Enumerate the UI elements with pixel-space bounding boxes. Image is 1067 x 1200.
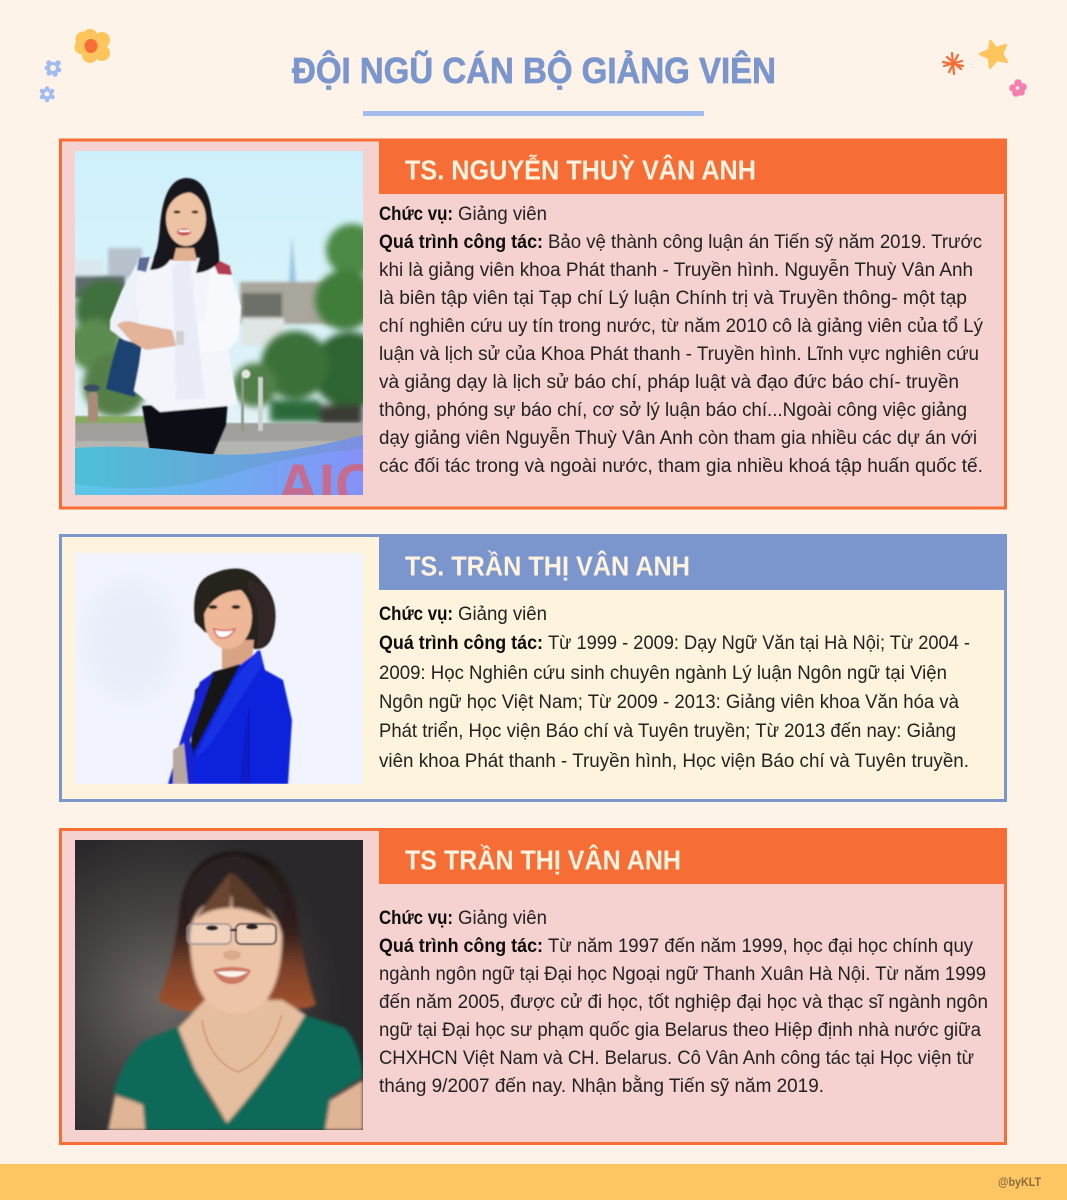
- left sleeve: [109, 262, 138, 344]
- panel: TS. Nguyễn Thuỳ Vân Anh: [60, 139, 1007, 518]
- footer bar: [0, 1164, 1067, 1200]
- nose: [223, 950, 241, 960]
- body text: là biên tập viên tại Tạp chí Lý luận Chính trị và Truyền thông- một tạp: [379, 288, 967, 309]
- neck: [173, 248, 197, 261]
- body text: CHXHCN Việt Nam và CH. Belarus. Cô Vân Anh công tác tại Học viện từ: [379, 1048, 974, 1069]
- title: ĐỘI NGŨ CÁN BỘ GIẢNG VIÊN: [292, 49, 776, 91]
- body text: ngành ngôn ngữ tại Đại học Ngoại ngữ Thanh Xuân Hà Nội. Từ năm 1999: [379, 964, 986, 985]
- right sleeve: [228, 276, 242, 350]
- body text: chí nghiên cứu uy tín trong nước, từ năm 2010 cô là giảng viên của tổ Lý: [379, 316, 983, 337]
- pants: [142, 399, 228, 455]
- hair: [158, 851, 316, 1012]
- card background: [60, 830, 1006, 1144]
- back hair: [156, 176, 220, 261]
- body text: Giảng viên: [458, 604, 547, 625]
- body text: Từ năm 1997 đến năm 1999, học đại học chính quy: [548, 936, 973, 957]
- body text: Quá trình công tác:: [379, 232, 543, 253]
- body text: Bảo vệ thành công luận án Tiến sỹ năm 2019. Trước: [548, 232, 982, 253]
- jacket: [168, 672, 214, 784]
- portrait photo: [75, 553, 363, 784]
- body text: Phát triển, Học viện Báo chí và Tuyên truyền; Từ 2013 đến nay: Giảng: [379, 721, 956, 742]
- body text: thông, phóng sự báo chí, cơ sở lý luận báo chí...Ngoài công việc giảng: [379, 400, 967, 421]
- heading bar: [379, 139, 1007, 194]
- body text: [379, 908, 988, 1097]
- body text: các đối tác trong và ngoài nước, tham gia nhiều khoá tập huấn quốc tế.: [379, 456, 983, 477]
- icon: small blue flower bottom: [40, 86, 55, 102]
- body text: khi là giảng viên khoa Phát thanh - Truyền hình. Nguyễn Thuỳ Vân Anh: [379, 259, 973, 281]
- heading: TS. NGUYỄN THUỲ VÂN ANH: [405, 154, 756, 186]
- face: [166, 192, 206, 246]
- card background: [60, 140, 1006, 508]
- body text: Chức vụ:: [379, 604, 453, 625]
- body text: Từ 1999 - 2009: Dạy Ngữ Văn tại Hà Nội; Từ 2004 -: [548, 633, 970, 654]
- wave: [75, 435, 363, 488]
- bag: [106, 338, 142, 397]
- body text: và giảng dạy là lịch sử báo chí, pháp luật và đạo đức báo chí- truyền: [379, 372, 959, 393]
- body text: Quá trình công tác:: [379, 936, 543, 957]
- body text: [379, 604, 970, 772]
- credit: @byKLT: [998, 1177, 1041, 1189]
- necklace: [202, 1015, 282, 1072]
- body text: viên khoa Phát thanh - Truyền hình, Học viện Báo chí và Tuyên truyền.: [379, 751, 969, 772]
- glasses: [187, 924, 231, 944]
- icon: orange asterisk: [943, 53, 963, 74]
- body text: Chức vụ:: [379, 908, 453, 929]
- shirt body: [134, 257, 238, 412]
- skin: neck and chest: [178, 1000, 306, 1125]
- hair: [194, 569, 276, 649]
- body text: Chức vụ:: [379, 204, 453, 225]
- face: [204, 585, 252, 649]
- portrait photo: AIC: [277, 453, 377, 518]
- heading: TS TRẦN THỊ VÂN ANH: [405, 844, 681, 876]
- body text: Giảng viên: [458, 204, 547, 225]
- body text: đến năm 2005, được cử đi học, tốt nghiệp đại học và thạc sĩ ngành ngôn: [379, 992, 988, 1013]
- heading bar: [379, 535, 1007, 590]
- body text: ngữ tại Đại học sư phạm quốc gia Belarus theo Hiệp định nhà nước giữa: [379, 1020, 981, 1041]
- inner blouse: [190, 664, 242, 759]
- heading: TS. TRẦN THỊ VÂN ANH: [405, 550, 690, 582]
- face: [190, 896, 282, 1014]
- body text: dạy giảng viên Nguyễn Thuỳ Vân Anh còn tham gia nhiều các dự án với: [379, 427, 977, 449]
- hands and watch: [117, 321, 176, 350]
- shirt: [113, 1015, 363, 1130]
- icon: pink flower: [1009, 79, 1027, 97]
- portrait photo: [75, 840, 363, 1130]
- neck: [221, 638, 256, 670]
- arms: [108, 1095, 145, 1130]
- body text: Ngôn ngữ học Việt Nam; Từ 2009 - 2013: Giảng viên khoa Văn hóa và: [379, 692, 959, 713]
- card background: [60, 536, 1006, 800]
- tablet: [173, 743, 188, 784]
- hair sides over shirt: [149, 248, 170, 271]
- panel: TS. Trần Thị Vân Anh: [60, 535, 1007, 800]
- icon: orange flower: [74, 29, 110, 63]
- icon: small blue flower top: [45, 60, 61, 77]
- body text: Giảng viên: [458, 908, 547, 929]
- body text: 2009: Học Nghiên cứu sinh chuyên ngành Lý luận Ngôn ngữ tại Viện: [379, 663, 947, 684]
- title underline: [363, 111, 704, 116]
- body text: luận và lịch sử của Khoa Phát thanh - Truyền hình. Lĩnh vực nghiên cứu: [379, 344, 979, 365]
- panel: TS Trần Thị Vân Anh: [60, 829, 1007, 1144]
- icon: yellow star: [980, 41, 1007, 68]
- heading bar: [379, 829, 1007, 884]
- body text: Quá trình công tác:: [379, 633, 543, 654]
- mouth: [213, 967, 251, 984]
- body text: [379, 204, 983, 477]
- portrait photo: [75, 151, 363, 495]
- body text: tháng 9/2007 đến nay. Nhận bằng Tiến sỹ năm 2019.: [379, 1075, 824, 1097]
